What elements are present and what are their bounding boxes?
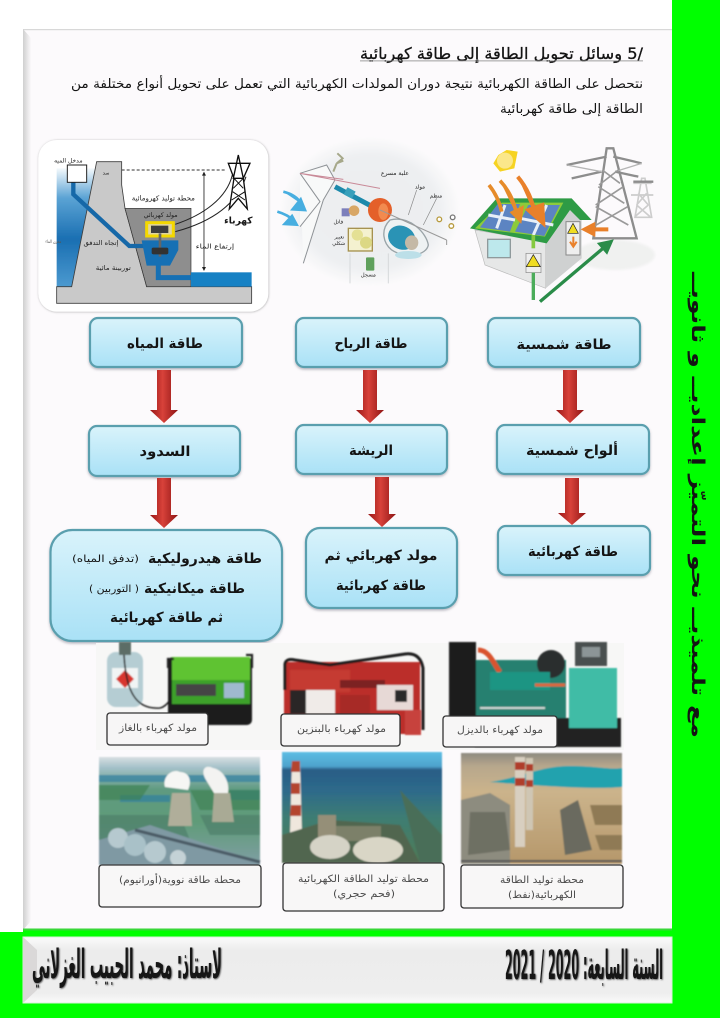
label: gas generator <box>107 713 208 745</box>
illustration: wind turbine nacelle: علبة مسرع <box>381 170 409 177</box>
label: coal power station: (فحم حجري) <box>333 889 395 900</box>
box: hydraulic, mechanical, electrical energy: (تدفق المياه) <box>72 554 139 565</box>
arrow: panels to electrical energy <box>558 478 586 525</box>
box: wind energy: طاقة الرياح <box>334 336 408 352</box>
illustration: wind turbine nacelle: فاتل <box>333 219 344 225</box>
label: oil power station: محطة توليد الطاقة <box>500 875 584 886</box>
title: /5 وسائل تحويل الطاقة إلى طاقة كهربائية <box>360 44 644 64</box>
box: electrical energy <box>498 526 650 575</box>
box: electrical energy: طاقة كهربائية <box>528 544 618 560</box>
box: blade: الريشة <box>349 443 393 459</box>
illustration: wind turbine nacelle: منظم <box>430 193 442 199</box>
footer bar: لاستاذ: محمد الحبيب الغزلاني <box>32 942 222 988</box>
photo: diesel generator <box>443 642 621 747</box>
label: nuclear power station: محطة طاقة نووية(أورانيوم) <box>119 873 241 886</box>
illustration: hydroelectric dam cross-section: كهرباء <box>224 215 253 226</box>
intro text <box>71 75 643 117</box>
arrow: water energy to dams <box>150 370 178 423</box>
arrow: solar energy to panels <box>556 370 584 423</box>
photo: oil power station <box>461 753 623 908</box>
box: solar energy: طاقة شمسية <box>516 337 612 353</box>
illustration: hydroelectric dam cross-section: إرتفاع الماء <box>196 243 234 250</box>
box: solar energy <box>488 318 640 367</box>
box: dams <box>89 426 240 476</box>
box: generator then electrical energy <box>306 528 457 608</box>
arrow: wind energy to blade <box>356 370 384 423</box>
photo: coal power station <box>282 752 444 911</box>
illustration: hydroelectric dam cross-section: توربينة مائية <box>96 265 131 272</box>
illustration: hydroelectric dam cross-section: محطة توليد كهرومائية <box>132 194 195 202</box>
label: petrol generator <box>281 714 400 746</box>
intro text: الطاقة إلى طاقة كهربائية <box>500 102 643 117</box>
box: water energy: طاقة المياه <box>127 336 203 352</box>
label: diesel generator: مولد كهرباء بالديزل <box>457 725 543 736</box>
label: oil power station <box>461 865 623 908</box>
flow column: wind energy <box>296 318 457 608</box>
illustration: wind turbine nacelle: مولد <box>415 184 425 190</box>
sidebar vertical slogan: مع تلميذيــ نحو التميّز إعداديــ و ثانويــ <box>687 271 708 738</box>
box: blade <box>296 425 447 474</box>
illustration: wind turbine nacelle: تغيير <box>334 234 345 240</box>
illustration: hydroelectric dam cross-section <box>38 140 268 312</box>
illustration: wind turbine nacelle <box>277 138 459 286</box>
label: gas generator: مولد كهرباء بالغاز <box>118 723 197 734</box>
illustration: hydroelectric dam cross-section: مولد كهربائي <box>144 212 178 219</box>
label: petrol generator: مولد كهرباء بالبنزين <box>297 724 386 735</box>
box: solar panels: ألواح شمسية <box>526 441 618 459</box>
box: hydraulic, mechanical, electrical energy: ثم طاقة كهربائية <box>110 610 223 626</box>
label: coal power station <box>283 863 444 911</box>
flow column: solar energy <box>488 318 650 575</box>
box: hydraulic, mechanical, electrical energy: طاقة هيدروليكية <box>148 551 262 567</box>
label: diesel generator <box>443 716 557 747</box>
photo: nuclear power station <box>99 757 261 907</box>
box: generator then electrical energy: مولد كهربائي ثم <box>324 548 438 564</box>
illustration: solar house and pylon <box>470 148 655 302</box>
box: generator then electrical energy: طاقة كهربائية <box>336 578 426 594</box>
photo: gas generator <box>107 642 252 745</box>
box: water energy <box>90 318 242 367</box>
illustration: hydroelectric dam cross-section: مخزن الماء <box>45 239 62 245</box>
footer bar <box>23 937 672 1003</box>
main content panel <box>23 29 672 930</box>
label: coal power station: محطة توليد الطاقة الكهربائية <box>298 874 429 885</box>
box: solar panels <box>497 425 649 474</box>
illustration: hydroelectric dam cross-section: سد <box>103 170 109 176</box>
box: hydraulic, mechanical, electrical energy <box>50 530 282 641</box>
label: nuclear power station <box>99 865 261 907</box>
arrow: dams to conversion chain <box>150 478 178 528</box>
photo: petrol generator <box>281 654 423 746</box>
illustration: wind turbine nacelle: شكلي <box>332 241 345 247</box>
generators backdrop <box>96 643 624 750</box>
flow column: water energy <box>50 318 282 641</box>
box: dams: السدود <box>140 444 190 460</box>
intro text: نتحصل على الطاقة الكهربائية نتيجة دوران المولدات الكهربائية التي تعمل على تحويل أنواع مختلفة من <box>71 75 643 92</box>
box: hydraulic, mechanical, electrical energy: طاقة ميكانيكية <box>144 581 245 597</box>
label: oil power station: الكهربائية(نفط) <box>508 890 576 901</box>
illustration: hydroelectric dam cross-section: مدخل الميه <box>54 157 83 164</box>
illustration: wind turbine nacelle: مسجل <box>361 273 376 279</box>
illustration: hydroelectric dam cross-section: إتجاه التدفق <box>83 240 119 247</box>
box: hydraulic, mechanical, electrical energy: ( التوربين ) <box>89 584 139 595</box>
arrow: blade to generator <box>368 477 396 527</box>
box: wind energy <box>296 318 447 367</box>
